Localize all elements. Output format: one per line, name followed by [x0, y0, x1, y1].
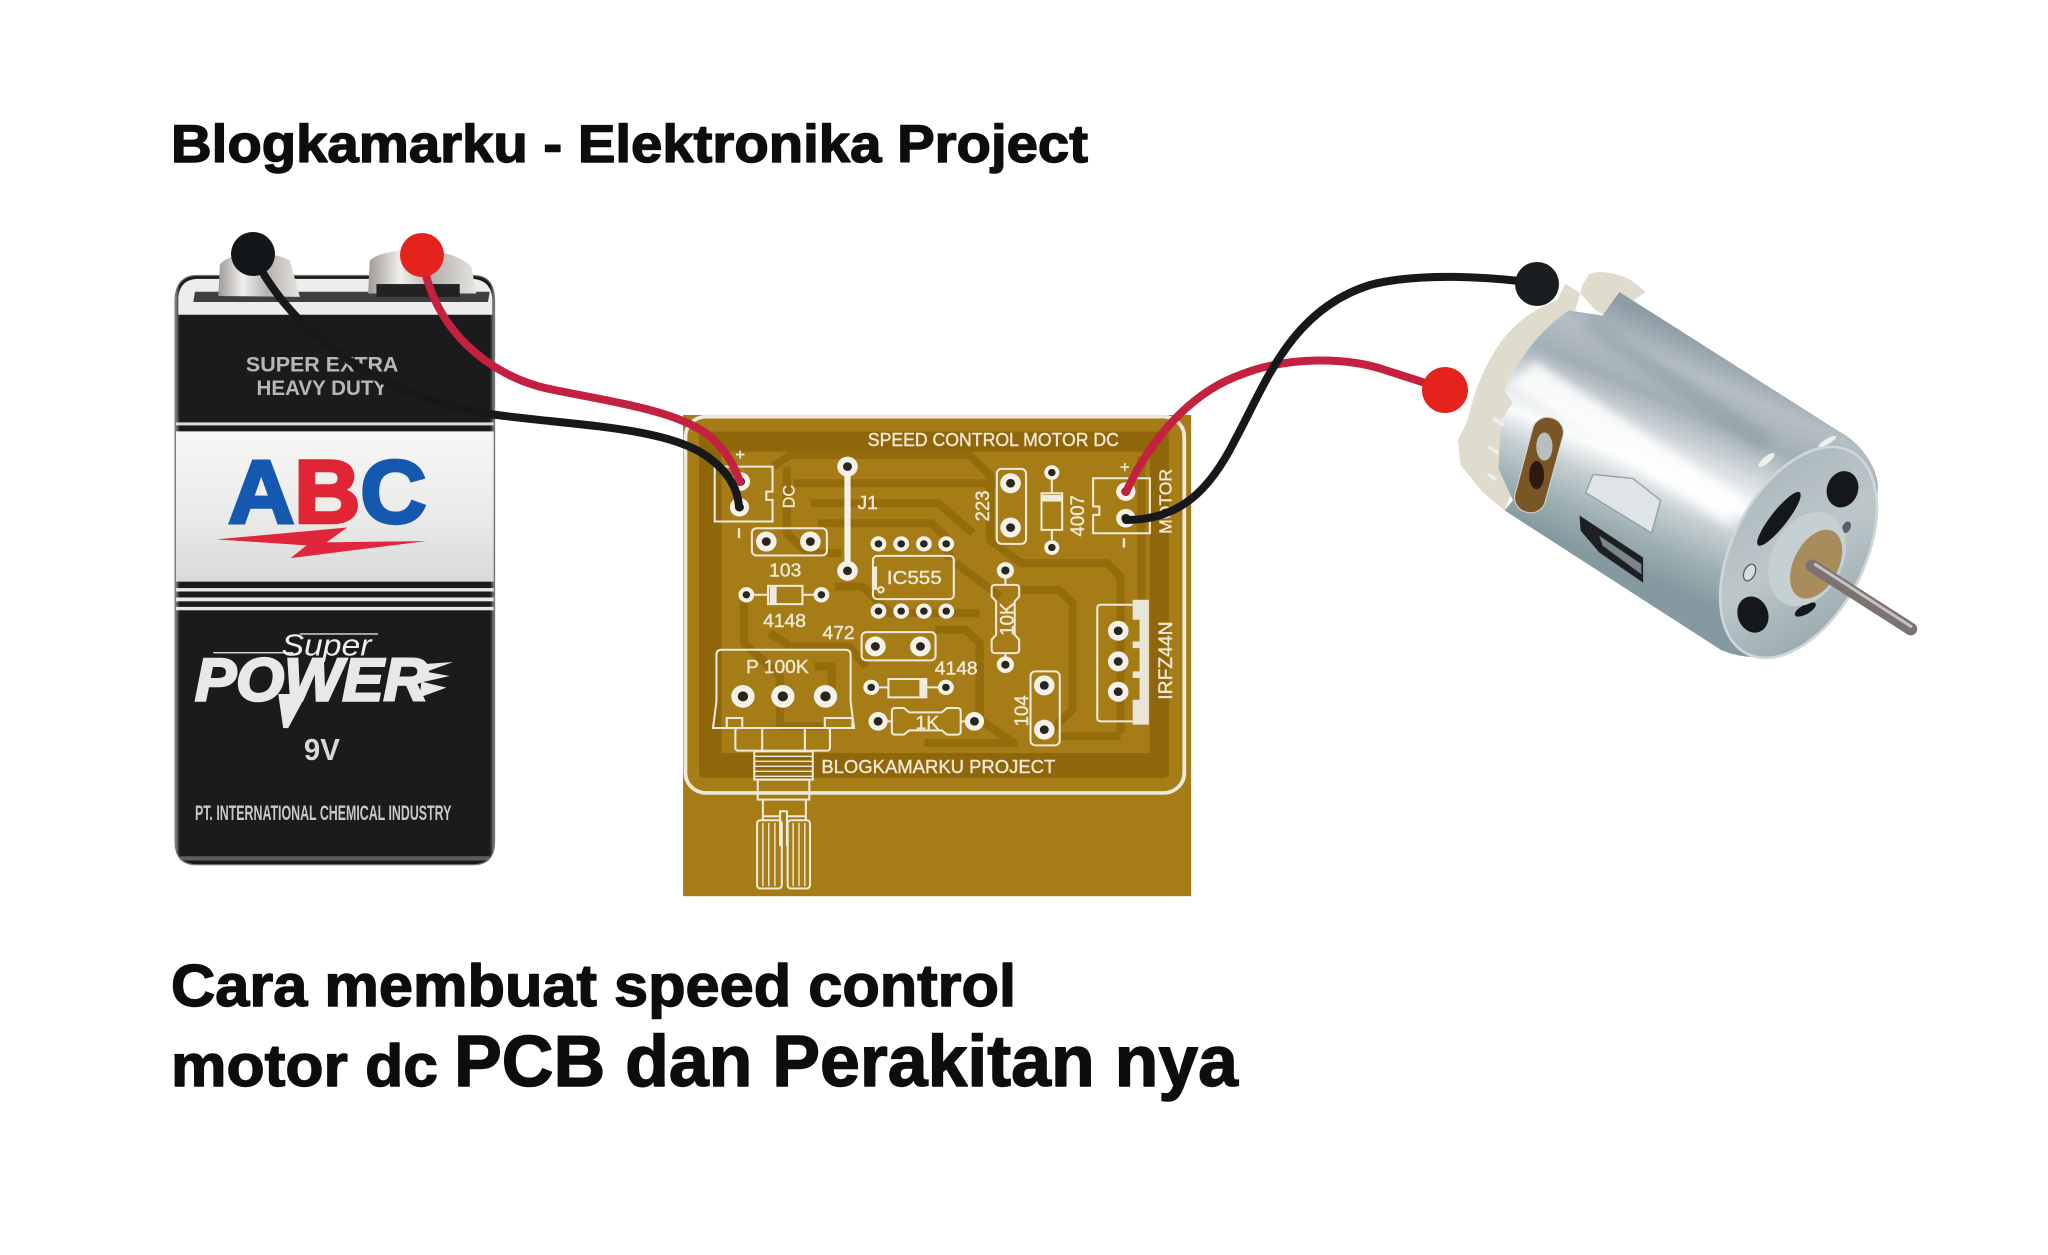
top silver rim — [178, 279, 492, 315]
highlight streak — [1510, 361, 1744, 526]
side terminal window — [1511, 414, 1567, 516]
capacitor 223 — [973, 469, 1026, 544]
MOSFET IRFZ44N: IRFZ44N — [1156, 621, 1177, 700]
board outline — [685, 417, 1184, 793]
diode 4007 — [1042, 465, 1089, 555]
motor shaft — [1812, 564, 1911, 629]
battery — [175, 250, 495, 865]
jumper J1 — [837, 457, 878, 581]
diode 4148 lower: 4148 — [935, 659, 978, 680]
battery negative terminal dot — [231, 232, 275, 276]
heading line 2: motor dc — [171, 1033, 438, 1099]
black wire: PCB to motor — [1126, 277, 1537, 520]
side window — [1580, 515, 1643, 583]
silver stripes bottom — [176, 588, 494, 610]
rear clip details — [1487, 417, 1837, 481]
diode 4148 lower — [863, 659, 978, 697]
capacitor 103 — [752, 528, 827, 581]
motor negative terminal dot — [1515, 262, 1559, 306]
DC connector: DC — [780, 485, 799, 508]
board footer: BLOGKAMARKU PROJECT — [821, 757, 1056, 778]
potentiometer P 100K: P 100K — [746, 657, 809, 678]
Super Power logo: POWER — [195, 646, 428, 714]
capacitor 104 — [1012, 671, 1060, 745]
ABC label panel — [176, 431, 494, 582]
black wire: battery to PCB — [252, 253, 739, 507]
motor connector: + — [1120, 459, 1130, 477]
red wire: PCB to motor — [1126, 360, 1444, 492]
label text top: SUPER EXTRA — [246, 353, 399, 376]
manufacturer: PT. INTERNATIONAL CHEMICAL INDUSTRY — [195, 802, 452, 826]
front face — [1688, 421, 1909, 683]
DC connector — [715, 446, 799, 538]
Super Power logo: Super — [282, 628, 374, 662]
motor connector: MOTOR — [1156, 469, 1176, 534]
capacitor 472: 472 — [823, 623, 855, 644]
front holes — [1732, 467, 1863, 637]
resistor 1K — [868, 708, 984, 735]
voltage: 9V — [304, 732, 340, 767]
Super Power logo — [195, 628, 453, 728]
capacitor 472 — [823, 623, 936, 660]
capacitor 103: 103 — [769, 561, 801, 581]
DC motor — [1458, 272, 1911, 683]
heading line 2 emphasis: PCB dan Perakitan nya — [454, 1022, 1239, 1102]
potentiometer P 100K — [713, 650, 854, 889]
resistor 1K: 1K — [916, 713, 939, 734]
heading line 1: Cara membuat speed control — [171, 953, 1016, 1019]
red wire: battery to PCB — [422, 255, 740, 482]
copper traces — [699, 432, 1169, 778]
resistor 10K — [992, 562, 1019, 673]
diode 4148 upper: 4148 — [763, 611, 806, 632]
ABC logo: ABC — [228, 442, 426, 541]
battery body — [175, 276, 495, 865]
capacitor 104: 104 — [1012, 695, 1033, 726]
diode 4007: 4007 — [1068, 495, 1089, 537]
plastic end cap — [1458, 272, 1646, 510]
diode 4148 upper — [738, 586, 829, 632]
bent tab — [1586, 474, 1661, 533]
motor can — [1498, 292, 1878, 657]
resistor 10K: 10K — [997, 602, 1018, 636]
silver stripes top — [176, 422, 494, 425]
motor connector — [1093, 459, 1176, 548]
brass bushing — [1779, 521, 1853, 607]
battery terminals — [218, 250, 476, 297]
lightning bolt — [217, 527, 426, 558]
capacitor 223: 223 — [973, 490, 994, 522]
IC555 — [871, 536, 954, 619]
MOSFET IRFZ44N — [1097, 600, 1177, 725]
PCB board — [683, 415, 1191, 896]
motor positive terminal dot — [1422, 367, 1468, 413]
battery positive terminal dot — [400, 233, 444, 277]
battery: HEAVY DUTY — [257, 376, 388, 400]
board title: SPEED CONTROL MOTOR DC — [868, 430, 1119, 451]
DC connector: + — [735, 446, 745, 464]
bearing boss — [1753, 499, 1861, 619]
jumper J1: J1 — [857, 493, 878, 514]
IC555: IC555 — [887, 568, 942, 589]
title: Blogkamarku - Elektronika Project — [171, 115, 1088, 174]
